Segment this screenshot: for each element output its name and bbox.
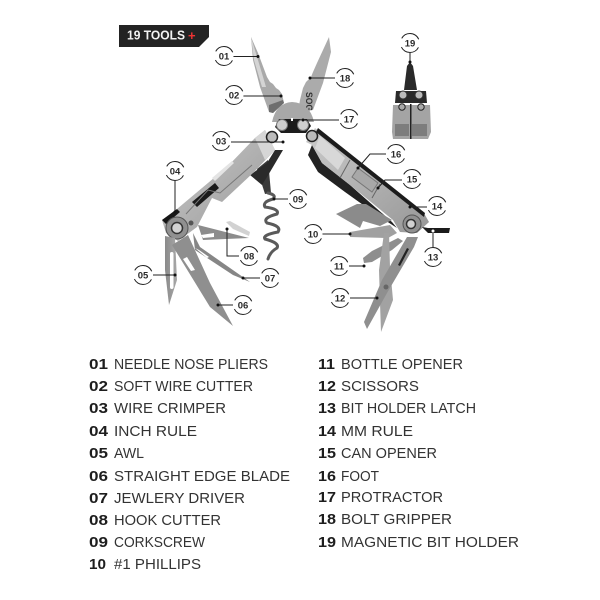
badge: 19 tools: 19 TOOLS xyxy=(127,28,185,42)
callout 04 xyxy=(166,162,184,214)
straight edge blade xyxy=(172,235,233,326)
callout 09: 09 xyxy=(293,194,303,206)
callout 15: 15 xyxy=(407,174,418,186)
scissors xyxy=(364,233,418,332)
item 10: #1 PHILLIPS xyxy=(114,557,201,573)
callout 11 xyxy=(330,256,366,276)
needle nose plier jaw xyxy=(251,37,284,113)
item 04: 04 xyxy=(89,423,109,440)
legend: left column xyxy=(89,356,290,573)
item 19: 19 xyxy=(318,534,336,551)
right handle xyxy=(306,128,429,233)
callout 19: 19 xyxy=(405,38,415,50)
bottle opener xyxy=(363,238,403,263)
item 06: 06 xyxy=(89,468,108,485)
callout 10 xyxy=(304,224,352,244)
callout 08: 08 xyxy=(244,252,254,262)
item 17: 17 xyxy=(318,489,336,506)
plier head xyxy=(272,102,314,133)
bolt gripper jaw xyxy=(298,37,331,112)
item 03: WIRE CRIMPER xyxy=(114,401,226,417)
awl xyxy=(165,236,177,305)
item 15: 15 xyxy=(318,445,336,462)
callout 03: 03 xyxy=(216,136,226,148)
item 12: SCISSORS xyxy=(341,379,419,395)
callout 10: 10 xyxy=(308,230,318,240)
item 11: BOTTLE OPENER xyxy=(341,357,463,373)
callout 06: 06 xyxy=(238,300,248,312)
callout 18 xyxy=(308,68,354,88)
callout 13 xyxy=(424,230,442,266)
callout 13: 13 xyxy=(428,252,438,264)
inset: magnetic bit holder xyxy=(392,62,431,139)
callout 06 xyxy=(216,296,252,314)
callout 12: 12 xyxy=(335,294,345,304)
callout 14: 14 xyxy=(432,202,443,212)
callout 02 xyxy=(224,86,282,104)
item 14 xyxy=(318,423,413,440)
item 16: FOOT xyxy=(341,469,379,485)
item 16: 16 xyxy=(318,468,336,485)
item 05 xyxy=(89,445,144,462)
item 07: 07 xyxy=(89,490,108,507)
callout 02: 02 xyxy=(229,90,239,102)
callout 07 xyxy=(242,268,280,288)
legend: right column xyxy=(318,356,519,551)
item 15: CAN OPENER xyxy=(341,446,437,462)
item 18: 18 xyxy=(318,511,336,528)
hook cutter xyxy=(198,221,250,240)
item 13: 13 xyxy=(318,400,336,417)
item 17: PROTRACTOR xyxy=(341,490,443,506)
bolt gripper jaw: SOG xyxy=(304,92,314,111)
callout 04: 04 xyxy=(170,166,181,178)
item 04 xyxy=(89,423,197,440)
item 11: 11 xyxy=(318,356,335,373)
item 10: 10 xyxy=(89,556,106,573)
item 02: SOFT WIRE CUTTER xyxy=(114,379,253,395)
callout 01 xyxy=(214,46,260,66)
callout 17: 17 xyxy=(344,114,354,126)
left handle xyxy=(162,130,283,241)
callout 15 xyxy=(376,170,422,190)
item 08: 08 xyxy=(89,512,108,529)
badge: 19 tools xyxy=(119,25,209,47)
item 18: BOLT GRIPPER xyxy=(341,512,452,528)
callout 05 xyxy=(134,266,176,284)
item 14: 14 xyxy=(318,423,337,440)
item 14: MM RULE xyxy=(341,424,413,440)
callout 19 xyxy=(400,34,420,64)
callout 01: 01 xyxy=(219,52,230,62)
callout 12 xyxy=(330,288,378,308)
corkscrew xyxy=(257,160,279,259)
item 07: JEWLERY DRIVER xyxy=(114,491,245,507)
item 03: 03 xyxy=(89,400,108,417)
callout 09 xyxy=(272,190,308,208)
callout 03 xyxy=(212,132,284,150)
callout 07: 07 xyxy=(265,274,275,284)
badge: 19 tools: + xyxy=(188,28,196,43)
item 08: HOOK CUTTER xyxy=(114,513,221,529)
item 09: CORKSCREW xyxy=(114,535,205,551)
item 12 xyxy=(318,378,419,395)
can opener xyxy=(336,204,392,228)
jewelry driver xyxy=(193,233,250,282)
phillips driver xyxy=(350,225,397,238)
item 01: 01 xyxy=(89,356,108,373)
callout 05: 05 xyxy=(138,270,149,282)
item 16 xyxy=(318,468,379,485)
item 05: 05 xyxy=(89,445,108,462)
item 05: AWL xyxy=(114,446,144,462)
item 06: STRAIGHT EDGE BLADE xyxy=(114,469,290,485)
callout 16: 16 xyxy=(391,150,401,160)
callout 14 xyxy=(408,196,446,216)
item 13: BIT HOLDER LATCH xyxy=(341,401,476,417)
callout 17 xyxy=(302,110,358,128)
item 04: INCH RULE xyxy=(114,424,197,440)
item 09: 09 xyxy=(89,534,108,551)
item 19: MAGNETIC BIT HOLDER xyxy=(341,535,519,551)
callout 11: 11 xyxy=(334,262,345,272)
callout 08 xyxy=(226,228,258,266)
bit holder latch xyxy=(422,227,450,233)
callout 18: 18 xyxy=(340,74,350,84)
item 02: 02 xyxy=(89,378,108,395)
item 01: NEEDLE NOSE PLIERS xyxy=(114,357,268,373)
illustration: multi-tool xyxy=(162,37,450,332)
item 12: 12 xyxy=(318,378,336,395)
callout 16 xyxy=(356,144,406,170)
